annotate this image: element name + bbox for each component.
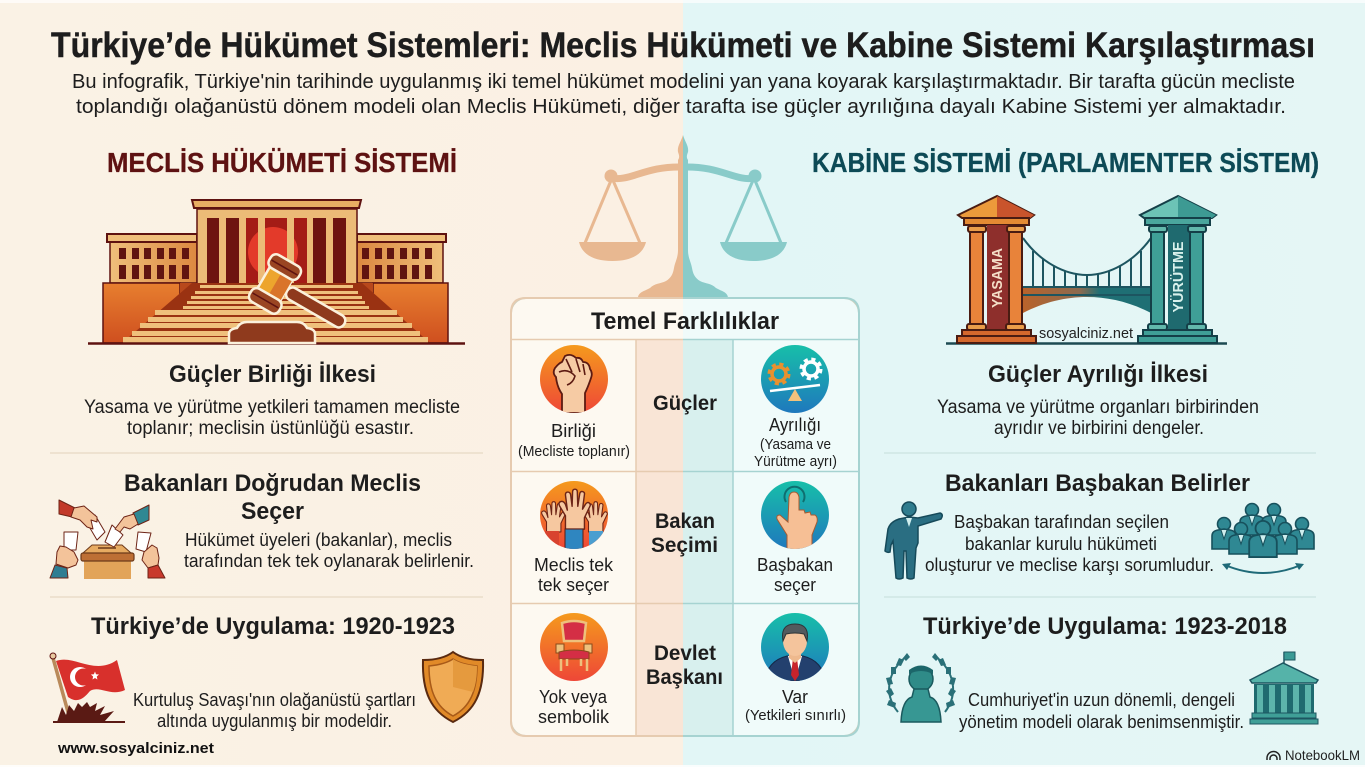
left value: (Mecliste toplanır) [518, 444, 630, 460]
subheading: Türkiye’de Uygulama: 1920-1923 [91, 613, 455, 640]
description [84, 397, 460, 439]
background: cool right half [683, 0, 1365, 767]
right value [745, 687, 846, 724]
icon: bust with laurel wreath [886, 653, 956, 722]
icon: parliament building with gavel [88, 200, 465, 347]
description: yönetim modeli olarak benimsenmiştir. [959, 711, 1244, 732]
icon: gears on a balance [761, 345, 829, 413]
right value: (Yasama ve [760, 437, 831, 453]
description: oluşturur ve meclise karşı sorumludur. [925, 554, 1214, 575]
icon: man in suit [761, 613, 829, 681]
description: toplanır; meclisin üstünlüğü esastır. [127, 418, 414, 439]
left value [534, 555, 614, 595]
description: Hükümet üyeleri (bakanlar), meclis [185, 529, 452, 550]
icon: shield [423, 652, 483, 722]
icon: bridge between two pillars: YASAMA [990, 247, 1006, 308]
top ballots and hands drawn together [50, 500, 165, 578]
icon: armchair [540, 613, 608, 681]
icon: bridge between two pillars: sosyalciniz.net [1039, 326, 1133, 342]
category: Devlet [654, 642, 716, 665]
panel: Temel Farklılıklar comparison table [511, 298, 859, 736]
left value [518, 421, 630, 460]
logo: NotebookLM: NotebookLM [1285, 747, 1360, 763]
right value: Ayrılığı [769, 415, 821, 435]
description: altında uygulanmış bir modeldir. [157, 710, 392, 731]
description [925, 511, 1214, 575]
description: Cumhuriyet'in uzun dönemli, dengeli [968, 689, 1235, 710]
right value: Yürütme ayrı) [754, 454, 837, 470]
left value [538, 687, 610, 727]
icon: cabinet group with arrow [1212, 504, 1314, 573]
intro paragraph: Bu infografik, Türkiye'nin tarihinde uygulanmış iki temel hükümet modelini yan yana koyarak karşılaştırmaktadır. Bir tarafta gücün mecliste [72, 70, 1295, 93]
category: Seçimi [651, 534, 718, 557]
right value: Var [782, 687, 808, 707]
subheading: Güçler Birliği İlkesi [169, 361, 376, 388]
block: Güçler Birliği İlkesi [84, 361, 460, 439]
description: tarafından tek tek oylanarak belirlenir. [184, 550, 474, 571]
panel: Kabine Sistemi (right column) [812, 147, 1319, 732]
intro paragraph [72, 70, 1295, 118]
category: Başkanı [646, 666, 723, 689]
description [133, 689, 416, 731]
icon: pointing hand [761, 481, 829, 550]
icon: ballot box with voting hands [50, 500, 165, 579]
description: Başbakan tarafından seçilen [954, 511, 1169, 532]
description [937, 397, 1259, 439]
left value: sembolik [538, 707, 610, 727]
block: Güçler Ayrılığı İlkesi [937, 361, 1259, 439]
left value: Meclis tek [534, 555, 614, 575]
description: ayrıdır ve birbirini dengeler. [994, 418, 1204, 439]
panel: Meclis Hükümeti (left column) [50, 147, 483, 731]
description: Kurtuluş Savaşı'nın olağanüstü şartları [133, 689, 416, 710]
description: Yasama ve yürütme yetkileri tamamen mecliste [84, 397, 460, 418]
description: Yasama ve yürütme organları birbirinden [937, 397, 1259, 418]
right value: seçer [774, 575, 816, 595]
icon: prime minister pointing [885, 502, 942, 579]
left value: Yok veya [539, 687, 608, 707]
block: Bakanları Doğrudan Meclis Seçer [50, 470, 474, 579]
heading: Meclis Hükümeti Sistemi: MECLİS HÜKÜMETİ SİSTEMİ [107, 147, 457, 178]
background: warm left half [0, 0, 683, 767]
category: Güçler [653, 392, 717, 415]
icon: balance scale [579, 135, 787, 298]
icon: bridge between two pillars [946, 196, 1227, 344]
row: Güçler [518, 345, 837, 470]
right value [754, 415, 837, 470]
category [646, 642, 723, 689]
subheading: Seçer [241, 498, 304, 525]
subheading [124, 470, 421, 525]
left value: Birliği [551, 421, 596, 441]
icon: raised hands [540, 481, 608, 551]
icon: Turkish flag with crowd [50, 653, 125, 722]
intro paragraph: toplandığı olağanüstü dönem modeli olan Meclis Hükümeti, diğer tarafta ise güçler ayrılığına dayalı Kabine Sistemi yer almaktadır. [76, 95, 1286, 118]
right value [757, 555, 833, 595]
description [959, 689, 1244, 732]
subheading: Bakanları Doğrudan Meclis [124, 470, 421, 497]
right value: Başbakan [757, 555, 833, 575]
icon: raised fist [540, 345, 608, 413]
description: bakanlar kurulu hükümeti [965, 533, 1157, 554]
subheading: Türkiye’de Uygulama: 1923-2018 [923, 613, 1287, 640]
row: Bakan Seçimi [534, 481, 833, 595]
block: Bakanları Başbakan Belirler [885, 470, 1314, 579]
row: Devlet Başkanı [538, 613, 846, 727]
subheading: Bakanları Başbakan Belirler [945, 470, 1250, 497]
category: Bakan [655, 510, 715, 533]
category [651, 510, 718, 557]
block: Türkiye'de Uygulama 1920-1923 [50, 613, 483, 731]
left value: tek seçer [538, 575, 609, 595]
description [184, 529, 474, 571]
table title: Temel Farklılıklar [591, 308, 779, 335]
subheading: Güçler Ayrılığı İlkesi [988, 361, 1208, 388]
right value: (Yetkileri sınırlı) [745, 708, 846, 724]
icon: bridge between two pillars: YÜRÜTME [1170, 241, 1187, 312]
watermark: website: www.sosyalciniz.net [57, 740, 214, 757]
icon: government building with flag [1250, 652, 1318, 724]
block: Türkiye'de Uygulama 1923-2018 [886, 613, 1318, 732]
